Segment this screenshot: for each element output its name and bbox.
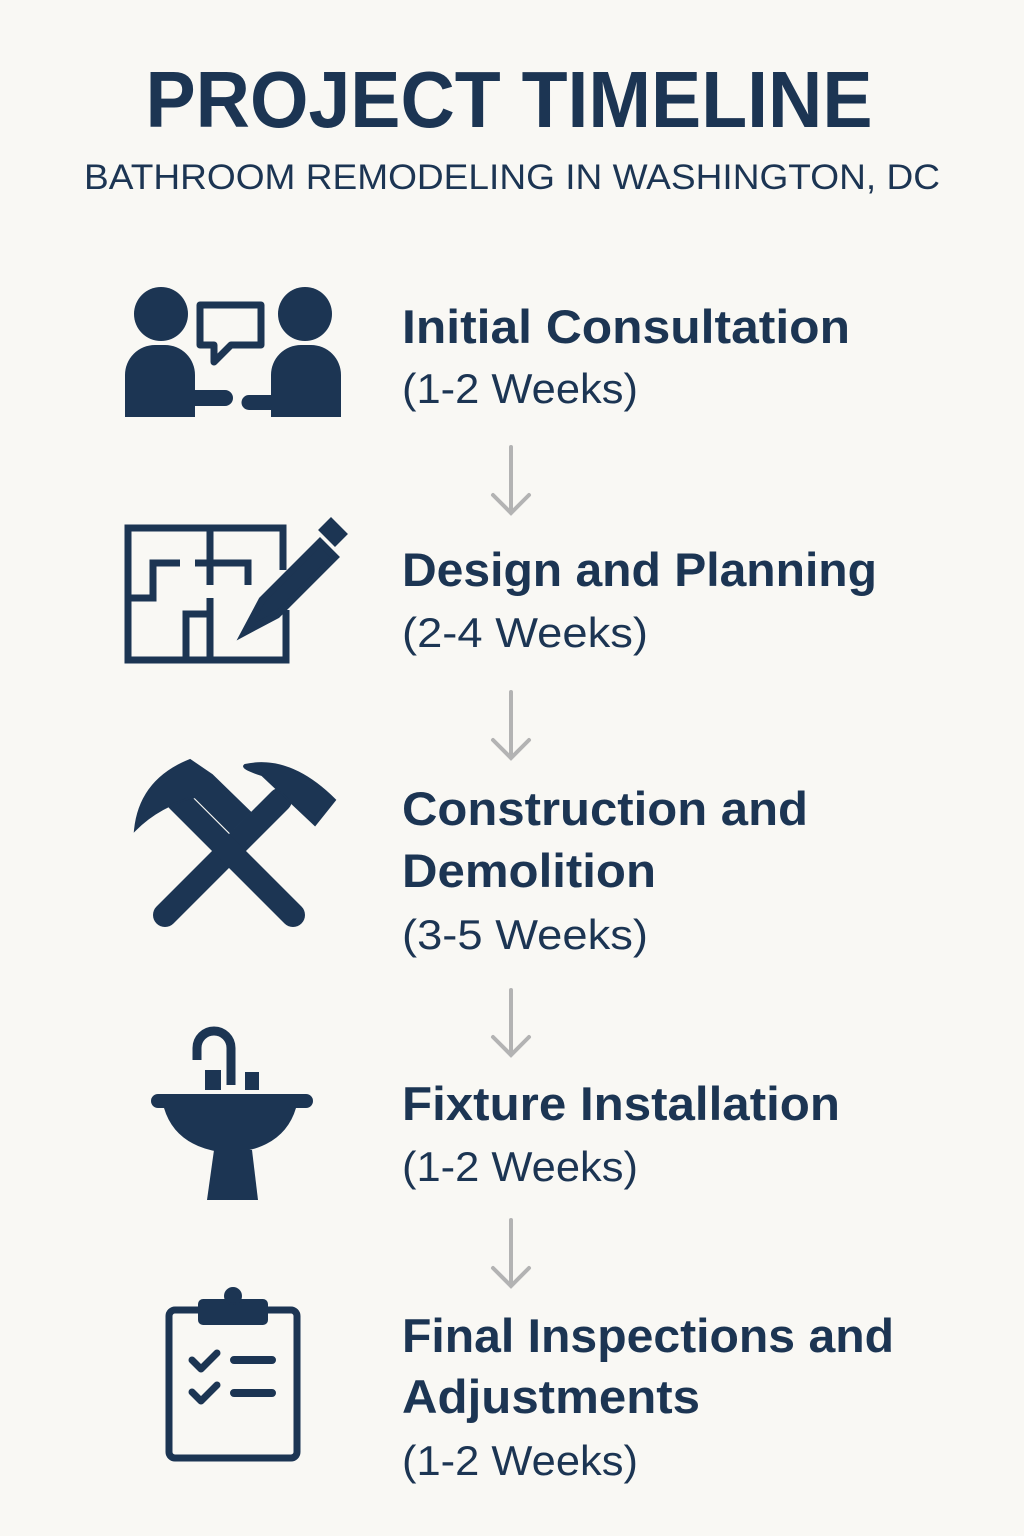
step 5 text: (1-2 Weeks)	[402, 1437, 638, 1484]
step 5 text: Adjustments	[402, 1370, 700, 1423]
step 3 text: Construction and	[402, 782, 808, 835]
arrow 2	[493, 692, 529, 758]
step 1 text	[402, 300, 850, 412]
step 2 text: (2-4 Weeks)	[402, 609, 648, 656]
step 1 text: (1-2 Weeks)	[402, 365, 638, 412]
step 3 text: Demolition	[402, 844, 656, 897]
step 4 text: Fixture Installation	[402, 1077, 840, 1130]
arrow 3	[493, 990, 529, 1055]
icon: clipboard	[169, 1288, 297, 1458]
step 4 text	[402, 1077, 840, 1190]
step 2 text	[402, 543, 877, 656]
step 5 text	[402, 1309, 894, 1484]
step 2 text: Design and Planning	[402, 543, 877, 596]
arrow 1	[493, 447, 529, 513]
icon: consultation	[125, 287, 341, 417]
step 4 text: (1-2 Weeks)	[402, 1143, 638, 1190]
step 3 text: (3-5 Weeks)	[402, 911, 648, 958]
arrow 4	[493, 1220, 529, 1286]
step 1 text: Initial Consultation	[402, 300, 850, 353]
icon: floor plan	[128, 522, 343, 660]
step 3 text	[402, 782, 808, 958]
step 5 text: Final Inspections and	[402, 1309, 894, 1362]
subtitle: BATHROOM REMODELING IN WASHINGTON, DC	[84, 158, 940, 197]
icon: sink	[151, 1031, 313, 1200]
icon: hammers	[135, 760, 335, 915]
title: PROJECT TIMELINE	[146, 55, 872, 144]
